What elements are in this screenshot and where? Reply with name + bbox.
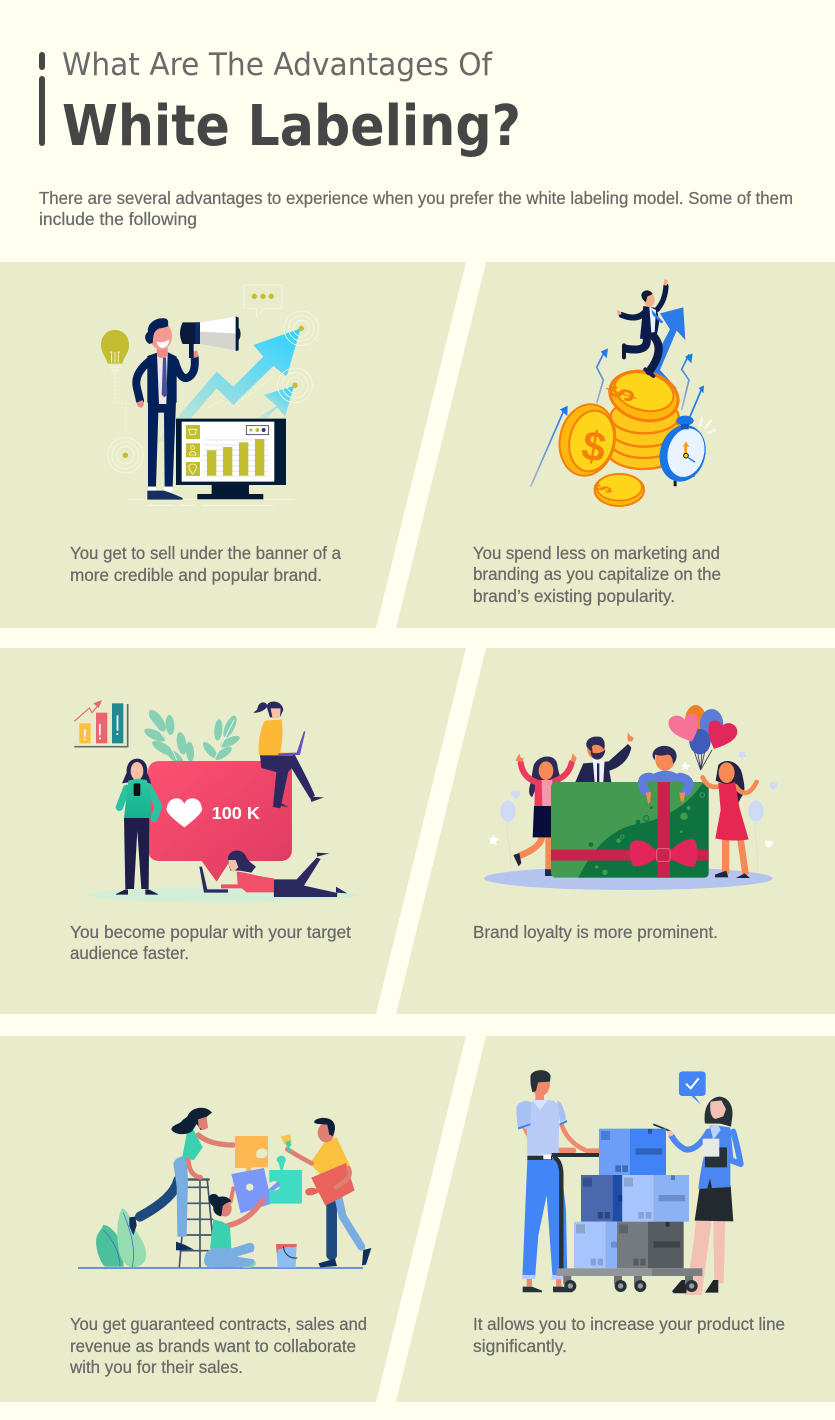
title accent bar [39,52,45,146]
bar chart icon [74,700,128,747]
cart [552,1155,702,1292]
woman standing [116,759,159,895]
megaphone [180,316,241,358]
panel: popularity [0,648,466,1014]
man with brush [281,1118,371,1267]
caption [70,543,341,585]
caption: revenue as brands want to collaborate [70,1336,356,1356]
caption: You become popular with your target [70,922,351,942]
caption: It allows you to increase your product line [473,1314,785,1334]
caption [473,543,721,606]
illustration: man with megaphone and monitor [101,285,319,505]
illustration: warehouse boxes on cart [516,1070,741,1295]
caption [70,922,351,963]
illustration: coins, clock and jumping man: $ [589,481,619,496]
ladder [179,1178,215,1267]
woman lying with laptop [199,851,347,897]
stopwatch [674,473,695,486]
gift card [551,782,709,878]
coin stack [608,400,679,469]
panel: product line [396,1036,835,1402]
woman [653,1097,741,1295]
check bubble [679,1071,706,1105]
title: White Labeling? [62,94,521,159]
bucket [276,1244,297,1267]
woman with laptop on bubble [253,702,324,808]
boxes [574,1129,689,1268]
caption [69,1314,367,1377]
red puzzle piece [305,1163,355,1206]
jumping man [622,286,666,376]
caption: You get guaranteed contracts, sales and [70,1314,367,1334]
intro text [39,188,793,229]
woman on ladder [129,1108,233,1250]
caption: significantly. [473,1336,567,1356]
caption: You get to sell under the banner of a [70,543,341,563]
intro text: include the following [39,209,197,229]
illustration: social media likes bubble with women [74,700,357,902]
like bubble [148,761,292,882]
caption [473,1314,785,1356]
large coin [553,399,622,481]
man [136,318,198,500]
caption: Brand loyalty is more prominent. [473,922,718,942]
illustration: social media likes bubble with women: 100 K [212,803,260,823]
man behind card: torso [643,746,687,783]
caption: You spend less on marketing and [473,543,720,563]
plant [96,1208,146,1268]
panel: lower marketing spend [396,262,835,628]
caption: brand’s existing popularity. [473,586,675,606]
title [62,47,521,159]
panel: guaranteed contracts [0,1036,466,1402]
illustration: team assembling puzzle [78,1108,371,1269]
caption: branding as you capitalize on the [473,564,721,584]
caption: with you for their sales. [69,1357,243,1377]
decorative balloons and stars [500,751,777,822]
woman right [703,761,757,878]
woman sitting [204,1188,263,1268]
puzzle pieces [235,1136,268,1183]
man behind card: arms [643,777,689,804]
balloons [669,705,737,770]
man [516,1070,599,1292]
illustration: coins, clock and jumping man [531,279,716,506]
monitor [176,419,286,499]
intro text: There are several advantages to experience when you prefer the white labeling model. Some of them [39,188,793,208]
small coin [595,474,644,506]
leaves [142,707,241,766]
man with beard [575,732,634,782]
illustration: coins, clock and jumping man: $ [578,421,609,471]
panel: brand loyalty [396,648,835,1014]
panel: credible brand [0,262,466,628]
illustration: coins, clock and jumping man: $ [598,380,645,406]
illustration: people with gift card and balloons [484,705,777,890]
title: What Are The Advantages Of [62,47,493,83]
bow [630,839,697,867]
woman left [513,753,577,876]
caption: more credible and popular brand. [70,565,322,585]
caption: audience faster. [70,943,189,963]
